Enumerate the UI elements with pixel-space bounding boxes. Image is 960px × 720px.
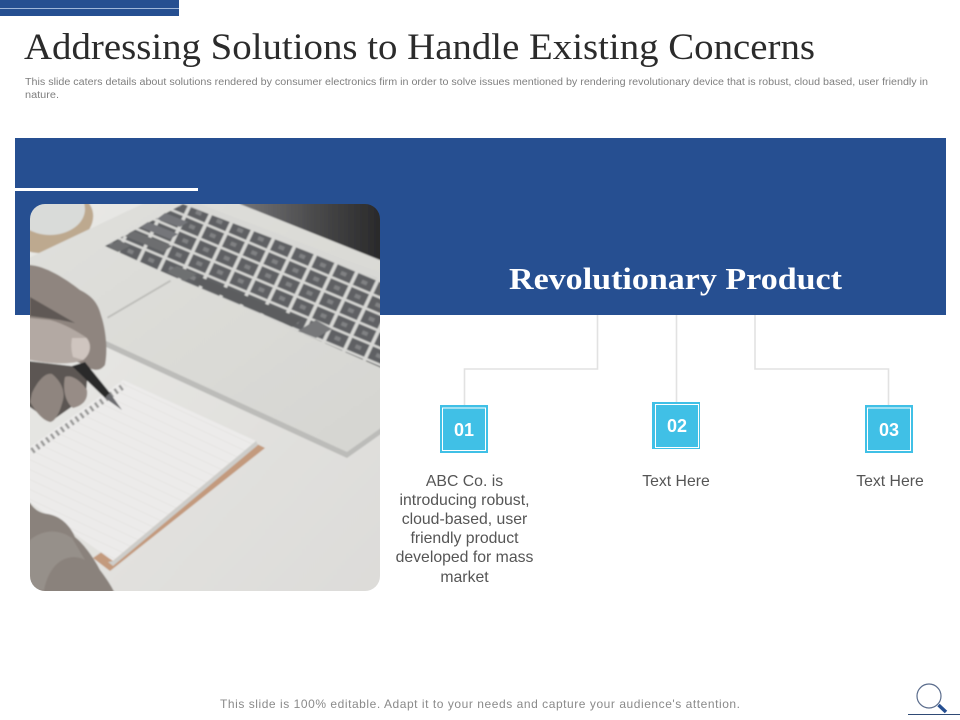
- blue banner panel: [15, 138, 946, 315]
- step 01 text: developed for mass: [396, 549, 534, 566]
- writing hand: [30, 264, 108, 423]
- step 02 text: Text Here: [642, 473, 710, 490]
- footer note: This slide is 100% editable. Adapt it to your needs and capture your audience's attention.: [220, 697, 740, 711]
- title: Addressing Solutions to Handle Existing Concerns: [24, 27, 815, 68]
- step 02 badge: [652, 402, 700, 449]
- step 03 badge: [865, 405, 913, 453]
- photo: laptop and notebook on desk: [30, 204, 380, 591]
- step 01 badge: [440, 405, 488, 453]
- step 02 badge: 02: [667, 416, 687, 436]
- banner heading: Revolutionary Product: [509, 261, 843, 296]
- step 03 text: Text Here: [856, 473, 924, 490]
- step 01 text: introducing robust,: [400, 492, 529, 509]
- icon: magnifier: [908, 684, 960, 715]
- step 01 text: [396, 473, 534, 586]
- subtitle description: This slide caters details about solutions rendered by consumer electronics firm in order to solve issues mentioned by rendering revolutionary device that is robust, cloud based, user friendly in: [25, 77, 928, 88]
- top accent bar: [0, 0, 179, 16]
- notebook: [20, 380, 265, 571]
- step 01 text: friendly product: [410, 530, 519, 547]
- notebook spiral: [32, 385, 125, 451]
- laptop body: [30, 204, 380, 458]
- pen: [72, 362, 122, 410]
- step 01 text: cloud-based, user: [402, 511, 527, 528]
- pen upper section: [20, 290, 52, 322]
- subtitle description: [25, 77, 928, 101]
- step 01 text: ABC Co. is: [426, 473, 503, 490]
- step 03 badge: 03: [879, 420, 899, 440]
- step 01 badge: 01: [454, 420, 474, 440]
- connector lines: [464, 315, 888, 405]
- coaster and mug: [30, 204, 94, 254]
- lower hand: [30, 502, 114, 591]
- step 01 text: market: [440, 569, 489, 586]
- subtitle description: nature.: [25, 90, 59, 101]
